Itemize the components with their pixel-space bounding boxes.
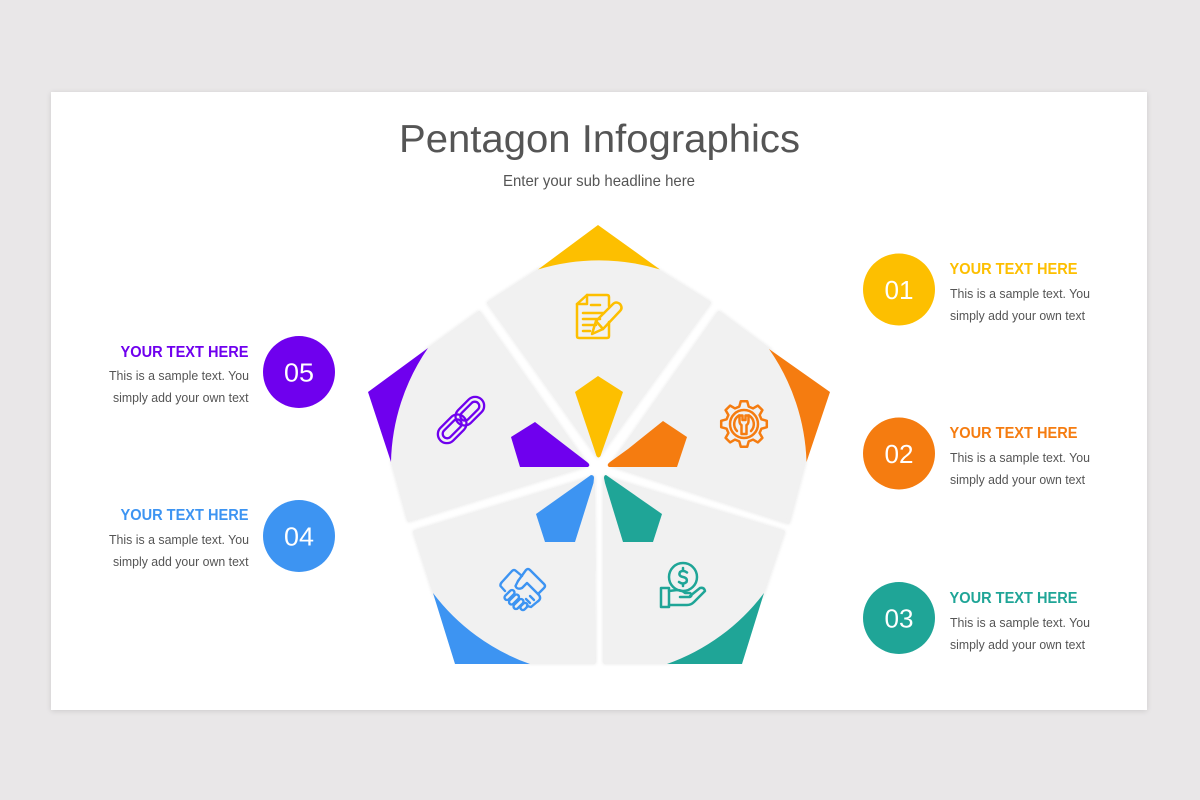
pentagon diagram (368, 225, 830, 664)
body 01: simply add your own text (950, 309, 1086, 323)
segment: right (612, 313, 804, 522)
badge 04: 04 (284, 522, 314, 552)
body 04: simply add your own text (113, 555, 249, 569)
inner pentagon: teal (604, 475, 662, 542)
icon: document with pen (577, 295, 622, 338)
item 04 (109, 500, 335, 572)
item 05 (109, 336, 335, 408)
badge 02 (863, 418, 935, 490)
icon: handshake (500, 569, 545, 611)
outer tip: yellow (538, 225, 660, 270)
badge 01 (863, 254, 935, 326)
segment: top (489, 262, 709, 456)
icon: chain link (434, 393, 488, 447)
inner pentagon: blue (536, 475, 594, 542)
card panel (51, 92, 1147, 711)
heading 01: YOUR TEXT HERE (950, 261, 1078, 278)
body 01: This is a sample text. You (950, 287, 1090, 301)
outer tip: purple (368, 348, 428, 462)
outer tip: orange (769, 349, 830, 462)
title: Pentagon Infographics (399, 118, 800, 161)
icon: hand holding coin (661, 563, 705, 607)
badge 04 (263, 500, 335, 572)
badge 05 (263, 336, 335, 408)
body 02: This is a sample text. You (950, 451, 1090, 465)
inner pentagon: yellow (575, 376, 623, 458)
body 05: This is a sample text. You (109, 369, 249, 383)
badge 02: 02 (884, 439, 914, 469)
segment: bottom right (605, 478, 783, 662)
heading 03: YOUR TEXT HERE (950, 590, 1078, 607)
badge 05: 05 (284, 358, 314, 388)
inner pentagon: purple (511, 422, 589, 467)
badge 03: 03 (884, 604, 914, 634)
outer tip: blue (433, 593, 530, 664)
heading 05: YOUR TEXT HERE (120, 344, 249, 361)
subtitle: Enter your sub headline here (503, 173, 695, 190)
body 03: This is a sample text. You (950, 616, 1090, 630)
segment: bottom left (415, 478, 594, 662)
outer tip: teal (667, 593, 764, 664)
badge 01: 01 (884, 275, 914, 305)
body 05: simply add your own text (113, 391, 249, 405)
body 03: simply add your own text (950, 638, 1086, 652)
inner pentagon: orange (608, 421, 687, 467)
item 01 (863, 254, 1090, 326)
icon: gear with wrench (721, 401, 767, 447)
body 04: This is a sample text. You (109, 533, 249, 547)
body 02: simply add your own text (950, 473, 1086, 487)
item 02 (863, 418, 1090, 490)
badge 03 (863, 582, 935, 654)
heading 02: YOUR TEXT HERE (950, 425, 1078, 442)
segment: left (393, 313, 586, 520)
heading 04: YOUR TEXT HERE (120, 507, 249, 524)
item 03 (863, 582, 1090, 654)
